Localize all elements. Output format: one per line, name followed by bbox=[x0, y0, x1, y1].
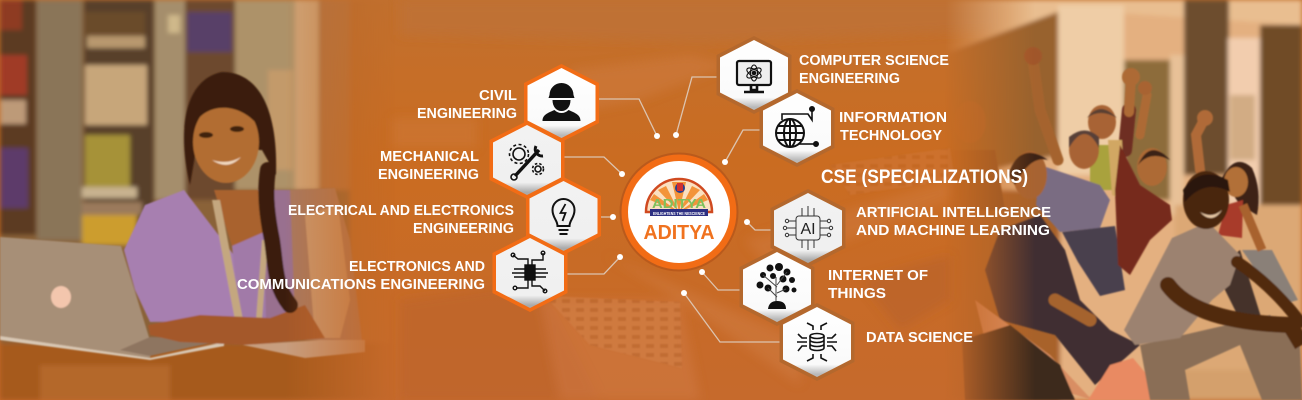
central logo: Aditya bbox=[620, 152, 738, 272]
label: electronics and communications engineering bbox=[237, 259, 485, 293]
label: internet of things: THINGS bbox=[828, 286, 886, 302]
icon: database with circuits bbox=[797, 323, 837, 361]
label: computer science engineering: ENGINEERING bbox=[799, 71, 900, 87]
hexagon: artificial intelligence bbox=[770, 189, 846, 267]
braid bbox=[266, 170, 290, 305]
front man bbox=[1140, 315, 1302, 400]
label: information technology bbox=[839, 110, 947, 144]
icon: construction worker bbox=[542, 83, 580, 121]
label: mechanical engineering bbox=[378, 149, 479, 183]
hexagon: civil engineering bbox=[524, 64, 599, 142]
icon: monitor with atom bbox=[737, 61, 771, 92]
back student bbox=[1090, 145, 1112, 190]
icon: circuit chip bbox=[511, 251, 548, 293]
bag bbox=[962, 325, 1075, 400]
notebook bbox=[243, 340, 365, 358]
icon: AI chip bbox=[783, 206, 833, 250]
label: internet of things bbox=[828, 268, 928, 302]
emblem arch with rays bbox=[646, 179, 712, 216]
label: civil engineering: CIVIL bbox=[479, 88, 517, 104]
label: computer science engineering bbox=[799, 53, 949, 87]
plaid student bbox=[1036, 165, 1110, 232]
hexagon: internet of things bbox=[740, 248, 814, 326]
hexagon: electronics and communications engineering bbox=[492, 234, 568, 312]
raised arm students bbox=[1033, 60, 1058, 160]
hexagon: computer science engineering bbox=[716, 36, 792, 114]
icon: globe with network links bbox=[776, 107, 818, 147]
label: mechanical engineering: ENGINEERING bbox=[378, 167, 479, 183]
label: civil engineering: ENGINEERING bbox=[417, 106, 517, 122]
arms bbox=[148, 305, 325, 345]
faded boy bbox=[954, 101, 986, 143]
hexagon: electrical and electronics engineering bbox=[526, 177, 601, 255]
laptop bbox=[0, 237, 224, 360]
icon: light bulb bbox=[552, 199, 574, 234]
label: electrical and electronics engineering: ENGINEERING bbox=[413, 221, 514, 237]
icon: gears and wrench bbox=[510, 144, 544, 180]
central logo: Aditya: ADITYA bbox=[644, 222, 714, 244]
label: electrical and electronics engineering: ELECTRICAL AND ELECTRONICS bbox=[288, 203, 514, 219]
right student bbox=[1222, 162, 1259, 215]
front girl bbox=[985, 215, 1140, 385]
label: information technology: INFORMATION bbox=[839, 110, 947, 126]
label: artificial intelligence and machine learning bbox=[856, 205, 1051, 239]
icon: technology tree bbox=[756, 263, 796, 309]
hexagon: data science bbox=[780, 303, 854, 381]
connector lines and dots bbox=[555, 77, 786, 342]
red shirt student bbox=[1115, 145, 1172, 275]
label: artificial intelligence and machine learning: AND MACHINE LEARNING bbox=[856, 223, 1050, 239]
photo: group of cheering students bbox=[953, 0, 1302, 400]
emblem arch with rays: ENLIGHTENS THE NESCIENCE bbox=[653, 211, 705, 216]
label: civil engineering bbox=[417, 88, 517, 122]
hexagon: mechanical engineering bbox=[490, 121, 564, 199]
label: artificial intelligence and machine learning: ARTIFICIAL INTELLIGENCE bbox=[856, 205, 1051, 221]
label: mechanical engineering: MECHANICAL bbox=[380, 149, 479, 165]
label: electronics and communications engineering: COMMUNICATIONS ENGINEERING bbox=[237, 277, 485, 293]
label: information technology: TECHNOLOGY bbox=[840, 128, 942, 144]
label: electronics and communications engineering: ELECTRONICS AND bbox=[349, 259, 485, 275]
emblem arch with rays: ADITYA bbox=[652, 196, 707, 211]
hexagon: artificial intelligence: AI bbox=[800, 221, 816, 238]
heading: CSE specializations: CSE (SPECIALIZATIONS) bbox=[821, 167, 1028, 188]
label: electrical and electronics engineering bbox=[288, 203, 514, 237]
photo: student with laptop in library bbox=[0, 0, 369, 400]
shawl and body bbox=[290, 188, 362, 340]
label: computer science engineering: COMPUTER SCIENCE bbox=[799, 53, 949, 69]
label: data science: DATA SCIENCE bbox=[866, 330, 973, 346]
hexagon: information technology bbox=[760, 89, 834, 167]
label: internet of things: INTERNET OF bbox=[828, 268, 928, 284]
hair and face bbox=[184, 72, 276, 185]
